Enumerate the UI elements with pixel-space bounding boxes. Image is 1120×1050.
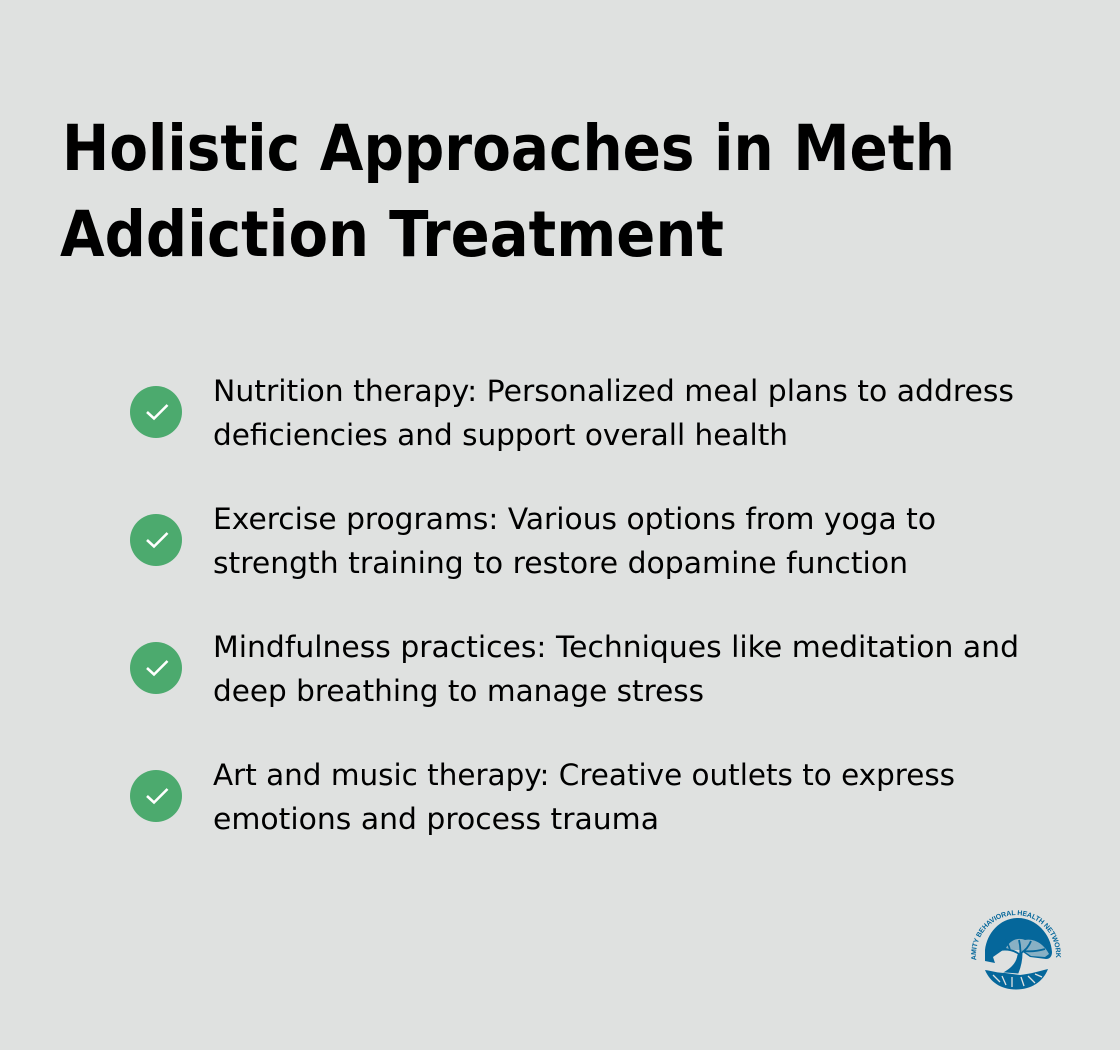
title (60, 112, 955, 271)
icon: green check (130, 386, 182, 438)
text: art and music therapy (213, 758, 955, 836)
logo: Amity Behavioral Health Network (971, 910, 1061, 990)
icon: green check (130, 642, 182, 694)
text: exercise programs: strength training to restore dopamine function (213, 546, 908, 580)
logo ring text: AMITY BEHAVIORAL HEALTH NETWORK (971, 910, 1061, 960)
text: nutrition therapy (213, 374, 1014, 452)
text: art and music therapy: emotions and process trauma (213, 802, 659, 836)
logo canopy light gaps (1006, 939, 1049, 957)
text: mindfulness practices: deep breathing to manage stress (213, 674, 704, 708)
text: mindfulness practices (213, 630, 1019, 708)
title: Holistic Approaches in Meth (62, 112, 955, 185)
logo tree canopy (985, 918, 1052, 963)
list item: nutrition therapy (130, 374, 1014, 452)
text: mindfulness practices: Mindfulness practices: Techniques like meditation and (213, 630, 1019, 664)
icon: green check (130, 770, 182, 822)
list item: mindfulness practices (130, 630, 1019, 708)
text: exercise programs (213, 502, 936, 580)
logo root slits (993, 974, 1042, 987)
text: nutrition therapy: Nutrition therapy: Personalized meal plans to address (213, 374, 1014, 408)
list item: exercise programs (130, 502, 936, 580)
icon: green check (130, 514, 182, 566)
text: nutrition therapy: deficiencies and support overall health (213, 418, 788, 452)
logo tree trunk and branches (990, 940, 1045, 973)
text: exercise programs: Exercise programs: Various options from yoga to (213, 502, 936, 536)
title: Addiction Treatment (60, 198, 724, 271)
logo roots bowl (985, 969, 1048, 990)
list item: art and music therapy (130, 758, 955, 836)
text: art and music therapy: Art and music therapy: Creative outlets to express (213, 758, 955, 792)
